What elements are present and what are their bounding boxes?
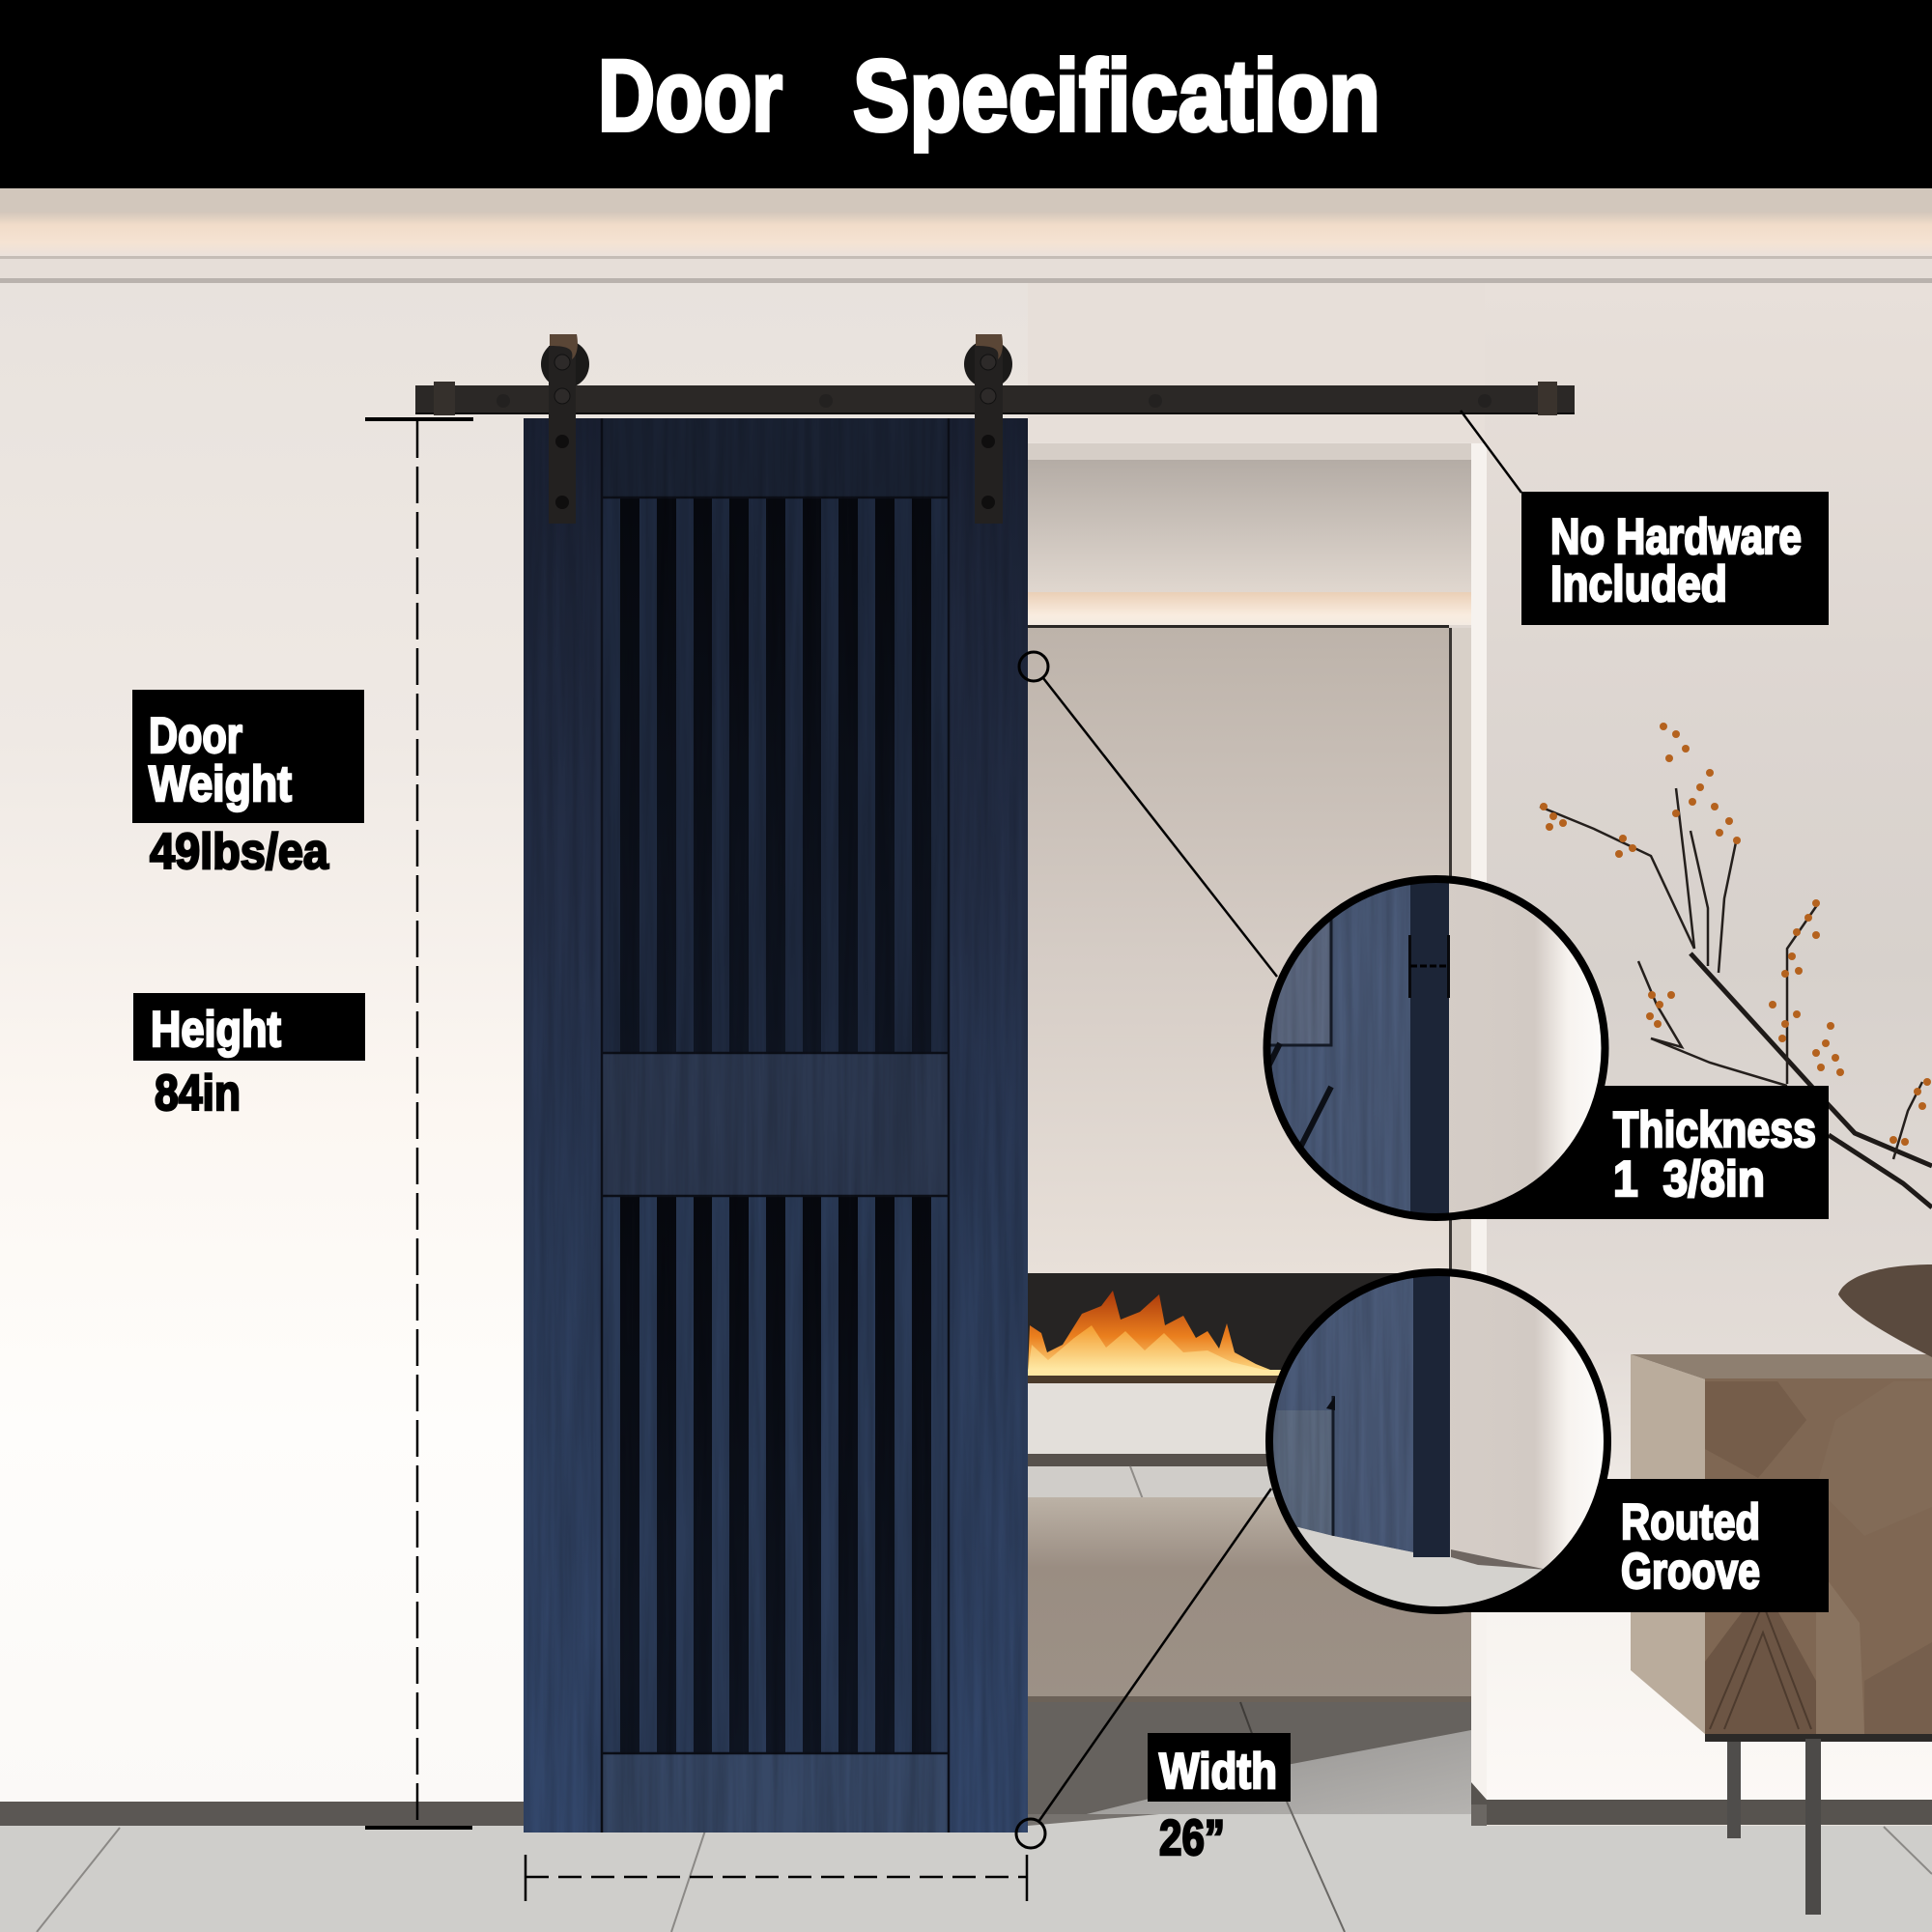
- callout box: routed groove: Routed: [1621, 1494, 1760, 1550]
- sideboard with bowl: [1631, 1264, 1932, 1915]
- callout: door weight: 49lbs/ea: [150, 824, 329, 880]
- magnifier: routed groove detail: [1256, 1265, 1623, 1623]
- callout: width: 26”: [1159, 1810, 1225, 1866]
- vertical slats: [603, 497, 949, 1753]
- leader lines to magnifiers: [1038, 678, 1277, 1822]
- slat gaps top section: [601, 497, 949, 1053]
- title: [598, 40, 1380, 153]
- magnifier: thickness detail: [1256, 869, 1623, 1227]
- height dimension line: [365, 419, 473, 1828]
- callout: no hardware included: No Hardware: [1550, 509, 1802, 565]
- barn door rail hardware: [415, 334, 1575, 524]
- decorative branches with berries: [1540, 723, 1932, 1208]
- callout: door weight: [132, 690, 364, 880]
- callout: width: [1148, 1733, 1291, 1866]
- title: Specification: [853, 40, 1380, 153]
- callout box: routed groove: Groove: [1621, 1544, 1760, 1600]
- fireplace: [1028, 1273, 1471, 1383]
- callout box: thickness: Thickness: [1613, 1102, 1816, 1158]
- callout: no hardware included: [1521, 492, 1829, 625]
- width dimension line: [526, 1855, 1027, 1901]
- title: Door: [598, 40, 782, 153]
- callout: height: 84in: [155, 1065, 241, 1122]
- slat gaps bottom section: [601, 1196, 949, 1753]
- callout: height: Height: [151, 1002, 281, 1058]
- leader line: hardware: [1461, 411, 1521, 493]
- callout: width: Width: [1159, 1744, 1277, 1800]
- callout: door weight: Weight: [149, 756, 292, 812]
- callout box: routed groove: [1449, 1479, 1829, 1612]
- marker circles: [1016, 652, 1048, 1848]
- header bar: [0, 0, 1932, 188]
- callout box: thickness: 1 3/8in: [1613, 1151, 1765, 1208]
- callout: height: [133, 993, 365, 1122]
- callout: no hardware included: Included: [1550, 556, 1727, 612]
- callout box: thickness: [1449, 1086, 1829, 1219]
- floor: [0, 1826, 1932, 1932]
- doorway: [1028, 443, 1471, 868]
- rails and stile joints: [602, 418, 949, 1833]
- callout: door weight: Door: [149, 708, 242, 764]
- jamb: [1471, 443, 1487, 1826]
- door panel: [524, 418, 1028, 1833]
